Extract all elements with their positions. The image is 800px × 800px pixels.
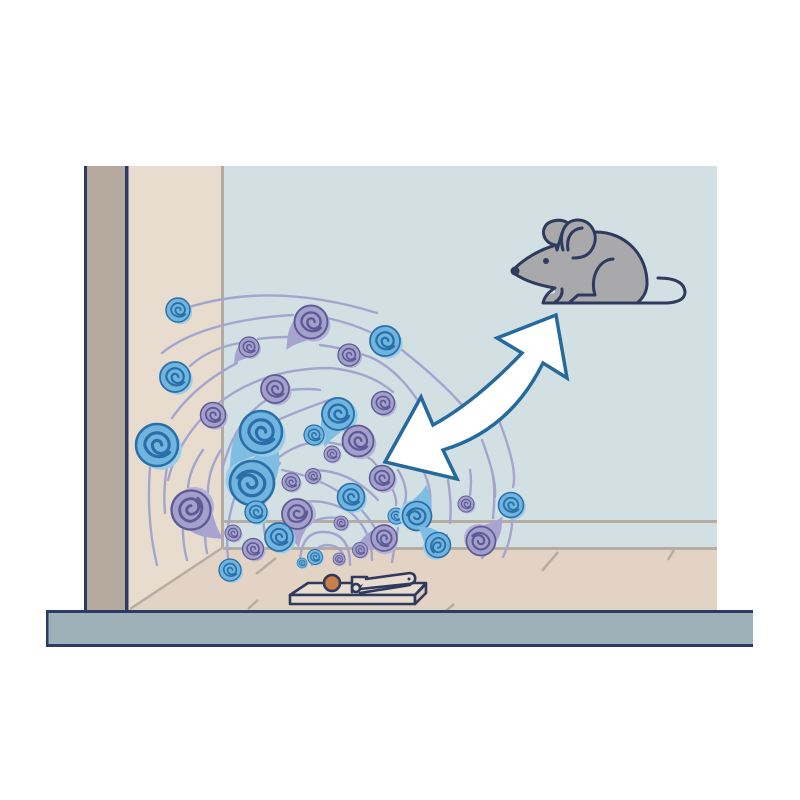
swirl: purple with tail: [356, 517, 404, 565]
mouse nose: [510, 266, 520, 276]
swirl: purple small: [458, 496, 475, 513]
swirl: purple: [372, 392, 397, 417]
swirl: purple with tail top: [286, 306, 330, 350]
swirl: blue with left tail: [417, 526, 450, 560]
swirl: blue upper right: [370, 326, 403, 359]
swirl: blue large with tail: [230, 411, 286, 468]
inner ear line: [568, 228, 582, 250]
swirl: purple: [261, 375, 292, 406]
swirl: blue on floor: [219, 559, 243, 583]
swirl: purple large with tail: [172, 487, 224, 539]
trap bar pin: [408, 578, 410, 580]
swirl: blue: [265, 523, 296, 554]
swirl: purple small with tail: [234, 337, 261, 364]
trap base front: [290, 595, 415, 604]
swirl: purple: [338, 344, 362, 368]
swirl: purple: [242, 538, 265, 561]
trap hinge: [352, 584, 360, 592]
scent swirls: [136, 298, 526, 583]
swirl: blue tiny: [308, 550, 324, 566]
scent wave arcs: [149, 295, 514, 565]
hip line: [570, 259, 613, 302]
mouse eye: [543, 258, 549, 264]
door frame column: [84, 166, 128, 612]
mouse body: [514, 232, 647, 303]
spring block: [352, 577, 367, 592]
double-headed arrow: [385, 315, 567, 479]
swirl: blue left: [160, 362, 193, 395]
swirl: blue: [245, 501, 269, 525]
swirl: blue upper left: [166, 298, 192, 324]
mouse: [510, 220, 685, 303]
baseboard bottom line: [223, 547, 717, 550]
wall corner line: [221, 166, 224, 549]
swirl: purple with tail down: [270, 491, 328, 548]
swirl: blue with flame tail: [391, 484, 443, 536]
swirl: purple tiny: [333, 553, 346, 566]
swirl: purple tiny: [225, 525, 242, 542]
trap base top: [290, 583, 426, 595]
swirl: blue centre: [338, 484, 367, 513]
swirl: purple small: [282, 473, 302, 493]
mouse trap: [290, 573, 426, 604]
swirl: purple under arrow: [370, 466, 397, 493]
swirl: purple tiny: [352, 542, 369, 559]
trigger line: [360, 585, 410, 593]
swirl: blue tiny: [297, 558, 308, 569]
left side wall: [127, 166, 223, 612]
ledge: [46, 610, 753, 647]
swirl: blue small: [304, 425, 326, 447]
back wall: [222, 166, 717, 549]
swirl: blue large flame: [220, 440, 288, 509]
swirl: purple with upward tail: [464, 516, 503, 556]
floor edge and board lines: [130, 548, 674, 611]
swirl: purple: [342, 426, 376, 459]
bait: [324, 575, 340, 591]
swirl: purple tiny: [334, 516, 349, 531]
swirl: blue large left: [136, 424, 182, 470]
front legs: [555, 289, 562, 302]
swirl: purple small: [324, 446, 341, 463]
trap base side: [415, 584, 426, 604]
mouse outline: [515, 232, 685, 303]
swirl: blue right: [498, 492, 526, 520]
floor: [127, 548, 717, 611]
swirl: blue with tail: [310, 393, 365, 448]
baseboard top line: [223, 520, 717, 523]
swirl: purple small: [306, 468, 322, 485]
trap bar: [360, 573, 415, 589]
swirl: blue small: [388, 508, 405, 525]
swirl: purple on wall corner: [200, 402, 228, 430]
front ear: [561, 220, 595, 258]
back ear: [543, 220, 569, 250]
